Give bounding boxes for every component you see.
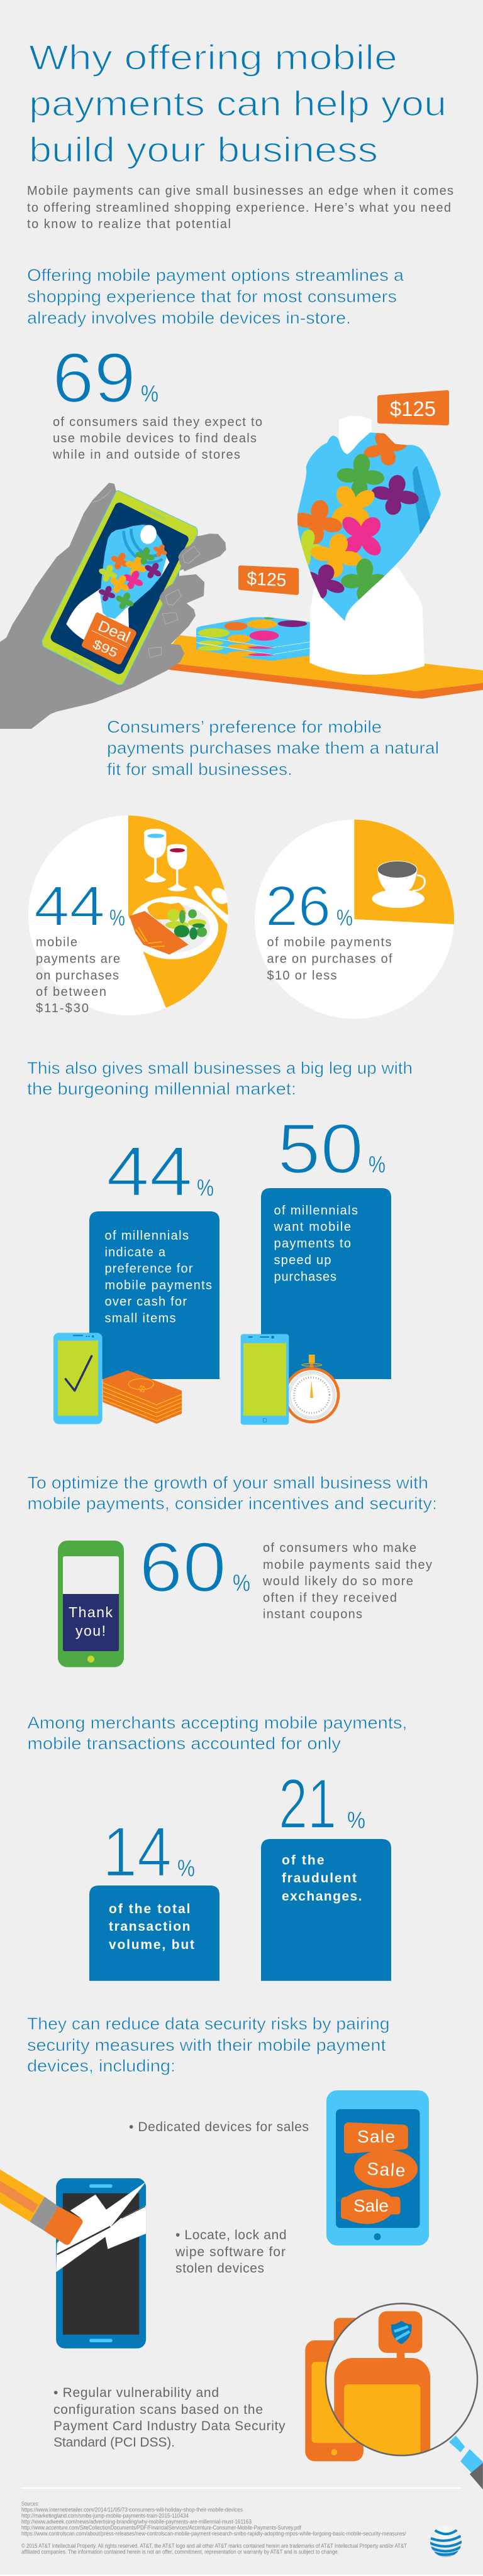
title bbox=[29, 38, 447, 170]
text: 60 percent description: would likely do so more bbox=[262, 1575, 413, 1588]
illustration: hand holding phone: $95 bbox=[91, 637, 119, 660]
pie chart: 26 percent bbox=[255, 819, 454, 1019]
bullet: locate lock and wipe: • Locate, lock and bbox=[175, 2228, 287, 2242]
panel: 21 percent box: exchanges. bbox=[282, 1889, 362, 1904]
copyright bbox=[21, 2543, 407, 2555]
icon: pencil eraser bbox=[0, 2169, 82, 2245]
icon: blank phone bbox=[241, 1334, 289, 1425]
bullet: dedicated devices: • Dedicated devices for sales bbox=[129, 2120, 309, 2134]
text: 69 percent description: while in and outside of stores bbox=[52, 448, 240, 462]
heading: data security bbox=[27, 2014, 390, 2075]
bullet: vulnerability scans: configuration scans based on the bbox=[53, 2403, 263, 2417]
bullet: locate lock and wipe bbox=[175, 2228, 287, 2276]
intro text: to offering streamlined shopping experience. Here’s what you need bbox=[27, 201, 451, 215]
icon: phone with check mark bbox=[53, 1333, 103, 1424]
text: 44 percent description: $11-$30 bbox=[36, 1001, 89, 1015]
icon: magnifying glass over phone bbox=[305, 2303, 483, 2489]
bullet: vulnerability scans bbox=[53, 2386, 286, 2450]
illustration: stack of shirts bbox=[196, 616, 310, 661]
number: 44 percent: 44 bbox=[34, 875, 105, 938]
text: 69 percent description: use mobile devices to find deals bbox=[53, 432, 257, 445]
price tag: 125 upper: $125 bbox=[390, 397, 436, 420]
stat: 44 percent of millennials: % bbox=[197, 1175, 214, 1201]
text: 26 percent description: of mobile payments bbox=[267, 936, 391, 949]
title: build your business bbox=[29, 129, 378, 170]
panel: 14 percent box: of the total bbox=[109, 1902, 190, 1916]
illustration: display table bbox=[169, 635, 483, 699]
panel: 21 percent box bbox=[261, 1839, 391, 1981]
sources bbox=[21, 2501, 406, 2537]
text: 69 percent description bbox=[52, 415, 262, 462]
text: 44 percent description: mobile bbox=[36, 936, 77, 949]
text: 60 percent description: instant coupons bbox=[263, 1607, 362, 1621]
stat: 69 percent: % bbox=[141, 381, 158, 407]
heading: streamlined shopping: Offering mobile payment options streamlines a bbox=[27, 266, 404, 285]
heading: merchants: Among merchants accepting mobile payments, bbox=[28, 1713, 408, 1732]
panel: 14 percent box: transaction bbox=[109, 1919, 190, 1934]
pie chart: 44 percent bbox=[28, 816, 232, 1015]
panel: 50 percent box bbox=[261, 1188, 391, 1379]
bullet: vulnerability scans: Standard (PCI DSS). bbox=[53, 2435, 175, 2450]
price tag: 125 lower bbox=[240, 567, 297, 593]
heading: incentives and security bbox=[28, 1473, 437, 1513]
text: 60 percent description: mobile payments said they bbox=[263, 1558, 432, 1572]
text: 44 percent description: of between bbox=[36, 985, 106, 999]
illustration: mannequin with scarf bbox=[284, 416, 441, 675]
stat: 14 percent: 14 bbox=[103, 1813, 172, 1891]
bullet: vulnerability scans: • Regular vulnerability and bbox=[53, 2386, 219, 2400]
heading: incentives and security: To optimize the growth of your small business with bbox=[28, 1473, 428, 1492]
sources: http://marketingland.com/smbs-jump-mobile-payments-train-2015-110434 bbox=[21, 2513, 189, 2519]
heading: millennial market: the burgeoning millennial market: bbox=[27, 1079, 296, 1098]
panel: 44 percent box: preference for bbox=[104, 1262, 193, 1275]
heading: data security: devices, including: bbox=[27, 2056, 175, 2075]
stat: 60 percent: 60 bbox=[139, 1528, 226, 1607]
stat: 50 percent of millennials: % bbox=[369, 1152, 386, 1178]
copyright: affiliated companies. The information contained herein is not an offer, commitment, representation or warranty by AT&T and is subject to change. bbox=[21, 2548, 339, 2555]
text: 44 percent description: payments are bbox=[36, 952, 120, 966]
icon: thank you phone: Thank bbox=[69, 1604, 113, 1620]
text: 60 percent description: of consumers who make bbox=[263, 1541, 416, 1555]
intro text: Mobile payments can give small businesses an edge when it comes bbox=[27, 184, 453, 198]
heading: merchants bbox=[28, 1713, 408, 1753]
intro text bbox=[27, 184, 453, 231]
stat: 60 percent: % bbox=[233, 1570, 250, 1596]
panel: 21 percent box: fraudulent bbox=[282, 1871, 357, 1886]
stat: 21 percent: 21 bbox=[279, 1764, 336, 1843]
heading: consumers preference bbox=[107, 718, 439, 779]
icon: stack of cash bbox=[103, 1370, 182, 1424]
bullet: locate lock and wipe: wipe software for bbox=[175, 2245, 286, 2259]
icon: wine glasses bbox=[144, 829, 187, 892]
panel: 14 percent box: volume, but bbox=[109, 1938, 194, 1952]
icon: coffee cup bbox=[372, 861, 425, 908]
panel: 44 percent box: small items bbox=[104, 1312, 176, 1326]
icon: thank you phone bbox=[58, 1541, 124, 1667]
stat: 69 percent: 69 bbox=[52, 339, 136, 417]
number: 44 percent: % bbox=[109, 905, 125, 931]
number: 44 percent bbox=[34, 875, 125, 938]
panel: 44 percent box bbox=[89, 1211, 219, 1379]
intro text: to know to realize that potential bbox=[27, 217, 231, 231]
heading: streamlined shopping: shopping experience that for most consumers bbox=[27, 287, 397, 306]
sources: http://www.accenture.com/SiteCollectionDocuments/PDF/FinancialServices/Accenture-Consumer-Mobile-Payments-Survey.pdf bbox=[21, 2524, 301, 2531]
sources: http://www.adweek.com/news/advertising-branding/why-mobile-payments-are-millennial-must-161163 bbox=[21, 2518, 252, 2524]
icon: tablet with sale tags: Sale bbox=[357, 2127, 395, 2146]
sources: https://www.internetretailer.com/2014/11/05/73-consumers-will-holiday-shop-their-mobile-devices bbox=[21, 2507, 243, 2513]
heading: data security: security measures with their mobile payment bbox=[27, 2036, 386, 2055]
icon: plate of food bbox=[128, 897, 218, 959]
icon: stack of cash: $ bbox=[136, 1383, 148, 1395]
illustration: hand holding phone: Deal bbox=[96, 618, 133, 646]
price tag: 125 lower: $125 bbox=[247, 569, 287, 591]
text: 26 percent description bbox=[267, 936, 392, 983]
text: 44 percent description bbox=[36, 936, 120, 1015]
text: 44 percent description: on purchases bbox=[36, 969, 119, 983]
bullet: vulnerability scans: Payment Card Industry Data Security bbox=[53, 2419, 286, 2433]
text: 26 percent description: are on purchases of bbox=[267, 952, 392, 966]
stat: 50 percent of millennials: 50 bbox=[277, 1110, 364, 1188]
icon: phone being erased bbox=[56, 2178, 146, 2349]
text: 60 percent description: often if they received bbox=[263, 1591, 397, 1605]
heading: millennial market bbox=[27, 1059, 413, 1098]
panel: 21 percent box: of the bbox=[282, 1853, 325, 1867]
panel: 50 percent box: want mobile bbox=[273, 1220, 351, 1234]
text: 26 percent description: $10 or less bbox=[267, 969, 337, 983]
price tag: 125 upper bbox=[379, 392, 447, 423]
icon: AT&T globe logo bbox=[430, 2528, 462, 2557]
heading: incentives and security: mobile payments, consider incentives and security: bbox=[28, 1494, 437, 1513]
title: payments can help you bbox=[29, 84, 447, 123]
panel: 44 percent box: mobile payments bbox=[104, 1279, 212, 1292]
panel: 50 percent box: purchases bbox=[274, 1270, 336, 1284]
panel: 50 percent box: payments to bbox=[274, 1236, 351, 1250]
heading: streamlined shopping bbox=[27, 266, 404, 327]
panel: 44 percent box: over cash for bbox=[104, 1295, 187, 1309]
stat: 44 percent of millennials: 44 bbox=[106, 1132, 192, 1211]
copyright: © 2015 AT&T Intellectual Property. All rights reserved. AT&T, the AT&T logo and all other AT&T marks contained herein are trademarks of AT&T Intellectual Property and/or AT&T bbox=[21, 2543, 407, 2549]
icon: stopwatch bbox=[285, 1355, 338, 1422]
illustration: hand holding phone bbox=[0, 483, 226, 729]
number: 26 percent: 26 bbox=[265, 875, 331, 938]
title: Why offering mobile bbox=[29, 38, 397, 77]
icon: thank you phone: you! bbox=[75, 1622, 106, 1639]
text: 69 percent description: of consumers said they expect to bbox=[53, 415, 262, 429]
heading: consumers preference: Consumers’ preference for mobile bbox=[107, 718, 382, 736]
panel: 14 percent box bbox=[89, 1886, 219, 1981]
heading: consumers preference: fit for small businesses. bbox=[107, 760, 292, 779]
heading: millennial market: This also gives small businesses a big leg up with bbox=[27, 1059, 413, 1078]
icon: knife and spoon bbox=[194, 886, 228, 924]
icon: tablet with sale tags: Sale bbox=[367, 2159, 406, 2180]
heading: data security: They can reduce data security risks by pairing bbox=[27, 2014, 390, 2033]
text: 60 percent description bbox=[262, 1541, 432, 1621]
icon: tablet with sale tags bbox=[326, 2090, 429, 2246]
sources: Sources: bbox=[21, 2501, 39, 2507]
stat: 21 percent: % bbox=[347, 1807, 365, 1833]
stat: 14 percent: % bbox=[177, 1855, 195, 1882]
sources: https://www.controlscan.com/about/press-releases/new-controlscan-mobile-payment-research-smbs-rapidly-adopting-mpos-while-forgoing-basic-mobile-security-measures/ bbox=[21, 2531, 406, 2537]
heading: consumers preference: payments purchases make them a natural bbox=[107, 739, 439, 758]
heading: merchants: mobile transactions accounted for only bbox=[28, 1734, 341, 1753]
panel: 50 percent box: of millennials bbox=[274, 1204, 358, 1218]
panel: 44 percent box: indicate a bbox=[104, 1245, 166, 1259]
panel: 44 percent box: of millennials bbox=[104, 1229, 189, 1243]
number: 26 percent: % bbox=[336, 905, 353, 931]
bullet: locate lock and wipe: stolen devices bbox=[175, 2261, 264, 2276]
panel: 50 percent box: speed up bbox=[274, 1253, 331, 1267]
icon: tablet with sale tags: Sale bbox=[353, 2196, 389, 2215]
heading: streamlined shopping: already involves mobile devices in-store. bbox=[27, 308, 351, 327]
